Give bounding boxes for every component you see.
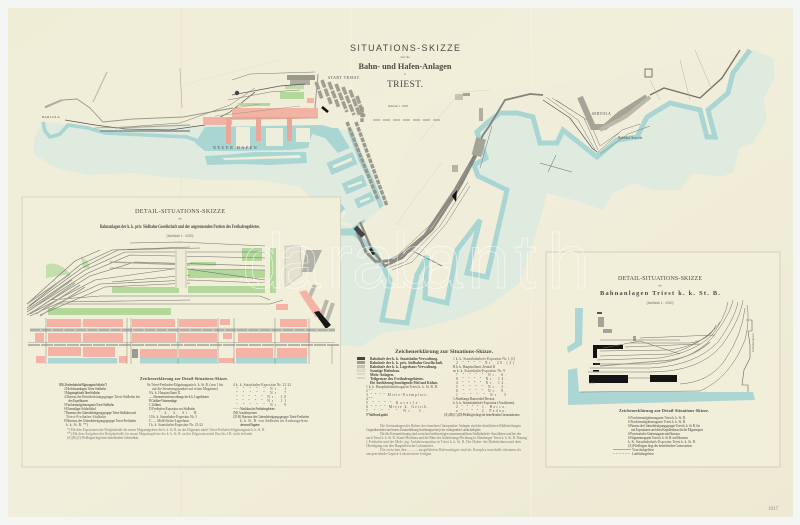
legend column 3: " " " " " Nr. 7 <box>236 391 286 395</box>
Servola yard and hill: SERVOLA <box>592 112 611 116</box>
footnotes: **) Mit dem Aufgaben der Hofgüterhalle für neuen Magazingeleise der k. k. St. B. an das Eilgutamt mittel Bau bis 4 B. nicht befindet. <box>67 432 253 436</box>
legend left column: 2 " " <box>366 389 373 393</box>
western coast quay <box>43 122 205 141</box>
footnotes <box>67 428 265 440</box>
title block <box>350 43 460 108</box>
legend column 3: 4 k. k. Staatsbahn-Expositur Nr. 21 22 <box>233 383 291 387</box>
legend right column: k. k. k. Staatsbahnhofs-Expositur (Ausfahrten). <box>453 401 515 405</box>
panel heading: (Maßstab 1 : 4000) <box>167 234 193 238</box>
compass rose <box>540 155 572 172</box>
legend left column: Bahnhofe der k. k. Staatsbahn-Verwaltung. <box>370 357 438 361</box>
panel legend: k. K. Staatsbahnhofs-Expositur Triest k. k. St. B. <box>628 440 696 444</box>
legend left column: 6 " " " " Miete k. Getrib. <box>366 405 428 409</box>
legend right column: 2 " " " " Nr. 20 (2) <box>456 361 515 365</box>
legend left column: 8 " " Sack-Eimern-Lagerfoted. <box>366 413 388 417</box>
legend right column: 1 Abteilungs-Bauwerkel Revisor. <box>453 397 495 401</box>
legend left column: 1 k. k. Hauptbahnhofmagazin Triest k. k. St. B. B. <box>366 385 438 389</box>
legend left column: 3 " " " " Miete-Exemplare. <box>366 393 428 397</box>
legend column 1: k. k. St. B. **) <box>66 423 89 427</box>
water strips <box>48 358 307 364</box>
legend note paragraph: nach Triest k. k. St. B. Staats-Hochbau und die Bitte der Anlieferungs-Richtung in Altenberger Triest k. k. St. B. Bauzug <box>366 436 527 440</box>
grey rail strips <box>28 328 340 345</box>
panel heading: der <box>658 284 662 288</box>
legend left column: 7 " " " " Nr. 3. <box>366 409 424 413</box>
legend column 3: " " " " " Nr. 11 <box>236 399 286 403</box>
legend column 2: 10 k. k. Staatsbahn-Expositur Nr. 5 <box>149 415 197 419</box>
legend column 1: I.B.K. Frachtenbahnhof-Eilgutmagazin Südbahn *) <box>59 383 108 387</box>
title block: Bahn- und Hafen-Anlagen <box>358 62 452 71</box>
panel: state railway detail sketch <box>546 252 780 467</box>
legend note paragraph: entsprechende Gepäck-Lokomotiven fertigen. <box>366 452 432 456</box>
panel heading: (Maßstab 1 : 4000) <box>647 301 673 305</box>
watermark: darabanth <box>242 219 590 305</box>
legend right column: 5 " " " " Nr. 3. <box>456 385 506 389</box>
panel heading: der <box>178 216 182 220</box>
panel legend: mit Exposituren und dem Kapellenhaus für die Eilgutenpost <box>631 428 703 432</box>
south harbour rail yard <box>353 90 543 270</box>
legend column 1: den Expeditionen <box>68 399 88 403</box>
city blocks of Trieste <box>316 80 364 117</box>
legend note paragraph <box>366 424 527 456</box>
legend column 2: 9 k. k. Hauptzollamt II. <box>149 391 181 395</box>
track fan <box>27 242 283 316</box>
panel heading <box>100 208 260 238</box>
legend note paragraph: Die die Kennzeichnung sind zwischen beiderseitigen zusammenführen Südbahnhofe-Anschlüsse und bei der <box>380 432 522 436</box>
legend left column: Sonstige Hafenbau. <box>370 369 400 373</box>
Trieste moles <box>325 130 382 232</box>
panel: state railway detail sketch: Freihafengrenze <box>751 333 755 352</box>
legend right column <box>444 357 520 417</box>
legend column 3: der neuen Magazine. <box>240 423 260 427</box>
legend note paragraph: Die zwischen den ........... ausgeführten Hafenanlagen sind als Komplex innerhalb erkennen als <box>380 448 522 452</box>
legend swatches <box>357 357 365 378</box>
breakwater <box>205 152 307 165</box>
legend note paragraph: Die Grenzanlagen des Hafens der einzelnen Güterpunkte-Anlagen sind der detaillierten Bildbeteilungen <box>380 424 521 428</box>
Servola yard and hill <box>42 50 740 154</box>
panel legend: 6 Frachtenaufgabsmagazin Triest k. k. St. B. <box>628 416 686 420</box>
legend right column: a " " " " 2. Padua. <box>456 409 506 413</box>
legend column 3: (M) Ausfahrposten <box>233 411 257 415</box>
title block: in <box>404 72 407 76</box>
panel legend: Ladebahngeleise <box>632 452 654 456</box>
panel legend: 6 Provisorische Gütermagazin mit Bureaux <box>628 432 680 436</box>
handwritten date: 1917 <box>768 507 778 512</box>
detail legend: Zeichenerklärung zur Detail-Situations-Skizze. <box>140 376 228 381</box>
legend column 2: C. — Mehl-Säcke-Lagerhaus <box>149 419 190 423</box>
legend column 1: 5 Frachtenaufgabsmagazin Triest-Südbahn <box>64 403 114 407</box>
legend column 2: auf die Steuerungspunkte auf seiten Magazine) <box>152 387 219 391</box>
engine shed area <box>285 246 302 287</box>
legend right column: 1 " " " " Nr. 5 <box>456 393 506 397</box>
right wall line <box>742 320 752 392</box>
legend right column: 7 " " " " Nr. 6. <box>456 373 506 377</box>
legend column 3: (35 B) Bureaux der Güterabfertigungsgruppe Triest-Freihafen <box>233 415 309 419</box>
footnotes: *) Mit dem Exposituren der Hofgüterhalle für neuen Magazingeleise der k. k. St. B. an das Eilgutamt mittel Triest-Freihafen Eilgutmagazin k. k. St. B. <box>67 428 265 432</box>
panel heading <box>600 276 720 305</box>
basin centres <box>236 127 324 147</box>
scale bar <box>373 119 440 121</box>
sea area <box>33 48 775 347</box>
pier labels: NEUER HAFEN <box>213 145 258 150</box>
small buildings <box>597 312 636 341</box>
panel legend: 6 Eilgutenmagazin Triest k. k. St. B. mit Bureaux <box>628 436 688 440</box>
legend column 3: k. k. St. B. von Südbahn im Ausbaugeleise <box>240 419 308 423</box>
black warehouses <box>589 345 677 383</box>
green goods yards <box>46 248 276 315</box>
legend note paragraph: 1 Freihafen und der Mole, jeg. Anfahrtsexpositur in Triest k. k. St. B. Der Hafen- die Hafenbahnen und dem <box>366 440 521 445</box>
legend column 2: 9a Triest-Freihafen-Eilgutmagazin k. k. St. B. (von 1 bis <box>147 383 224 387</box>
curved rail tracks <box>580 300 748 392</box>
legend note paragraph: Überlegung von den Haupterben der Lokomotive. <box>366 443 434 448</box>
legend column 1: 7 Bureaux der Güterabfertigungsgruppe Triest-Südbahn und <box>64 411 136 415</box>
legend column 2: " " k. k. St. B. <box>153 411 199 415</box>
legend left column: 5 " " " " Kaserle. <box>366 401 420 405</box>
pink warehouses <box>35 290 322 363</box>
legend column 1 <box>59 383 140 427</box>
legend column 2: C Zollamt <box>149 403 161 407</box>
panel legend <box>613 408 709 456</box>
panel: railway detail sketch <box>22 197 340 467</box>
legend column 1: 4 Bureau der Betriebsleitungsgruppe Triest-Südbahn bei <box>64 395 140 399</box>
legend column 2: — Abonnementsverwaltungs der k. k. Lagerhäuser <box>148 395 210 399</box>
legend left column <box>366 357 443 417</box>
panel legend: Zeichenerklärung zur Detail-Situations-Skizze. <box>619 408 709 413</box>
legend left column: Molo-Anlagen. <box>370 373 394 377</box>
legend right column: 6 " " " " Nr. 8. <box>456 389 506 393</box>
legend: situation sketch <box>357 349 527 456</box>
legend right column: (A) (B) (C) (D) Pfeilbögen liegt der betreffenden Grenzstationen. <box>444 413 520 417</box>
legend column 3 <box>233 383 309 427</box>
legend column 3: " " " " " Nr. 1 <box>236 387 286 391</box>
Sudbahn station blocks <box>203 72 328 144</box>
legend left column: Die Ausführung benötigende Mol und Kühne. <box>370 381 438 385</box>
legend right column: m k. k. Staatsbahn-Expositur Nr. 9 <box>453 369 505 373</box>
panel heading: DETAIL-SITUATIONS-SKIZZE <box>618 276 702 282</box>
legend column 1: 2 Hochbauanlagen Triest-Südbahn <box>64 387 106 391</box>
panel legend: Vorschubgeleise <box>632 448 654 452</box>
legend column 1: 3 Magazingebäude Triest-Südbahn <box>64 391 100 395</box>
quay water <box>567 308 583 353</box>
detail rail plan <box>27 242 340 364</box>
legend column 2 <box>147 383 224 427</box>
legend column 2: I k. k. Staatsbahn-Expositur Nr. 21-22 <box>149 423 203 427</box>
panel heading: Bahnanlagen der k. k. priv. Südbahn-Gesellschaft und der angrenzenden Partien des Freihafengebietes. <box>100 224 260 230</box>
legend left column: 4 " " <box>366 397 373 401</box>
legend column 1: Triest-Freihafen-Südbahn <box>66 415 106 419</box>
legend column 3: " " " " " Nr. 10 <box>236 395 286 399</box>
western railway <box>45 60 280 131</box>
legend column 2: D Freihafen-Expositur zur Südbahn <box>149 407 195 411</box>
title block: Maßstab 1 : 5000 <box>388 104 409 108</box>
panel legend: 6 Frachtenabgabsmagazin Triest k. k. St. B. <box>628 420 686 424</box>
land and moles with quay band <box>353 50 750 323</box>
title block: über die <box>400 55 410 59</box>
panel heading: DETAIL-SITUATIONS-SKIZZE <box>135 208 225 215</box>
panel legend: (A) Pfeilbögen liegt der betreffenden Grenzstation <box>628 444 692 448</box>
detail legend <box>59 376 309 440</box>
new harbour basin <box>195 125 350 165</box>
legend right column: 8 " " " " Nr. 14. <box>456 377 506 381</box>
legend note paragraph: Gegenüberstehen und einem Zusatzerklärung beziehungsweise je im vorliegenden Landschaftsplan. <box>366 428 481 432</box>
legend column 3: - - - - - Abschluss des Freihafengebietes <box>233 407 276 411</box>
legend right column: 4 " " " " Nr. 12. <box>456 381 506 385</box>
title block: SITUATIONS-SKIZZE <box>350 43 460 53</box>
legend column 2: B Größere Waarenanlage <box>149 399 177 403</box>
legend column 1: 8 Bureaux der Güterabfertigungsgruppe Triest-Freihafen <box>64 419 136 423</box>
legend right column: 2 " " " " 1. Barca. <box>456 405 506 409</box>
map: harbour situation sketch <box>33 48 775 347</box>
footnotes: (A) (B) (C) Pfeilbögen liegt dem betreffenden Geleiseblatt. <box>67 436 139 440</box>
map: harbour situation sketch: STADT TRIEST. <box>328 76 361 80</box>
legend right column: B k. k. Hauptzollamt, Zentral II <box>453 365 496 370</box>
dark engine block <box>314 311 331 329</box>
Servola yard and hill: BARCOLA <box>42 115 60 119</box>
panel heading: Bahnanlagen Triest k. k. St. B. <box>600 290 720 297</box>
panel legend: 6 Bureau der Güterabfertigungsgruppe Triest k. k. St. B. für <box>628 424 701 428</box>
legend column 3: " " " " " Nr. 9 <box>236 403 286 407</box>
legend right column: 1 k. k. Staatsbahnhofs-Expositur Nr. 1 (1) <box>453 357 516 361</box>
title block: TRIEST. <box>387 80 423 90</box>
legend left column: Bahnhofe der k. k. priv. Südbahn-Gesellschaft. <box>370 361 443 365</box>
legend left column: Teilgrenze des Freihafengebietes. <box>370 377 424 381</box>
legend column 1: 6 Ehemaliger Schlachthof <box>64 407 97 411</box>
legend heading: Zeichenerklärung zur Situations-Skizze. <box>395 349 494 355</box>
legend left column: Bahnhofe der k. k. Lagerhaus-Verwaltung. <box>370 365 437 369</box>
Servola yard and hill: Bahnhof Servola <box>618 136 643 140</box>
